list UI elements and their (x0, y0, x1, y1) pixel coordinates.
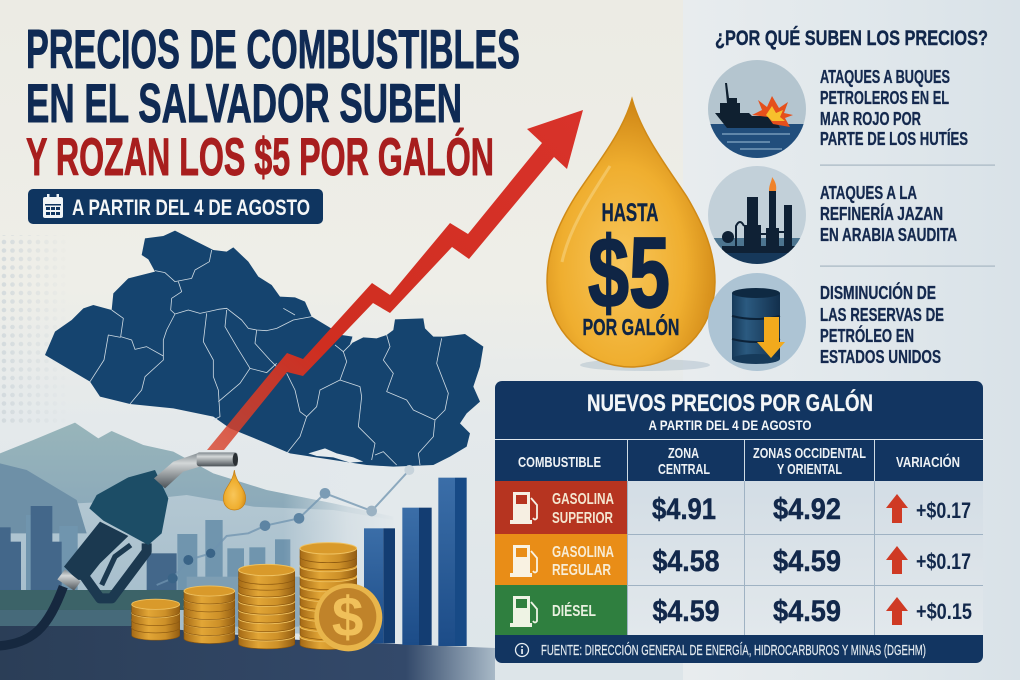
row: gasolina superior: +$0.17 (916, 498, 971, 523)
row: gasolina superior: SUPERIOR (552, 510, 613, 527)
icon: calendar (43, 194, 63, 218)
row: diésel (495, 585, 972, 635)
row: gasolina regular: REGULAR (552, 562, 611, 579)
fuel drop: hasta $5 por galón: POR GALÓN (582, 313, 680, 340)
table heading (587, 389, 873, 433)
title: PRECIOS DE COMBUSTIBLES (26, 18, 520, 80)
date badge (28, 189, 323, 224)
column headers: ZONA (668, 445, 699, 462)
icon: refinery (708, 166, 806, 264)
column headers: COMBUSTIBLE (518, 454, 601, 471)
row: diésel: $4.59 (773, 595, 841, 628)
line chart (157, 465, 414, 585)
title: Y ROZAN LOS $5 POR GALÓN (26, 127, 494, 187)
text block: disminución de reservas: DISMINUCIÓN DE (820, 282, 936, 303)
right side fog (283, 460, 400, 647)
fuel drop: hasta $5 por galón: HASTA (602, 199, 658, 227)
icon: small fuel drop (223, 470, 246, 510)
row: gasolina superior: $4.91 (652, 493, 716, 526)
text block: ataques a buques: MAR ROJO POR (820, 109, 921, 129)
text block: ataques a la refinería: REFINERÍA JAZAN (820, 203, 943, 224)
dollar coin: $ (332, 587, 363, 650)
text block: ataques a la refinería (820, 183, 957, 245)
rising red arrow (207, 110, 583, 450)
text block: ataques a buques: PARTE DE LOS HUTÍES (820, 128, 968, 149)
table heading: NUEVOS PRECIOS POR GALÓN (587, 389, 873, 417)
fuel nozzle (0, 452, 238, 646)
coin stacks (132, 543, 357, 650)
city skyline (0, 506, 329, 627)
icon: oil barrel with down arrow (708, 273, 806, 371)
table heading: A PARTIR DEL 4 DE AGOSTO (648, 417, 812, 433)
icon: fuel pump (510, 596, 537, 627)
text block: disminución de reservas: PETRÓLEO EN (820, 325, 914, 346)
date badge: A PARTIR DEL 4 DE AGOSTO (72, 195, 310, 220)
text block: disminución de reservas: ESTADOS UNIDOS (820, 347, 941, 367)
dollar coin (314, 583, 382, 651)
text block: ataques a buques: PETROLEROS EN EL (820, 88, 949, 108)
column headers: ZONAS OCCIDENTAL (753, 445, 866, 462)
column headers: VARIACIÓN (896, 453, 960, 471)
row: gasolina regular: +$0.17 (916, 549, 971, 574)
row: gasolina regular: $4.58 (652, 545, 720, 578)
scene foreground (0, 452, 467, 651)
row: diésel: DIÉSEL (552, 601, 596, 620)
row: diésel: $4.59 (652, 595, 720, 628)
column headers (518, 445, 960, 478)
icon: fuel pump (510, 545, 537, 577)
title (26, 18, 520, 187)
row: gasolina regular: $4.59 (773, 545, 841, 578)
text block: ataques a buques (820, 67, 968, 149)
icon: fuel pump (510, 492, 537, 524)
column headers: Y ORIENTAL (777, 461, 842, 478)
row: gasolina superior: $4.92 (773, 493, 841, 526)
row: gasolina superior (495, 481, 971, 534)
text block: disminución de reservas: LAS RESERVAS DE (820, 305, 944, 325)
map of El Salvador (45, 231, 483, 467)
background scene: mountains and city (0, 423, 400, 647)
text block: ataques a la refinería: EN ARABIA SAUDITA (820, 225, 957, 245)
text block: ataques a buques: ATAQUES A BUQUES (820, 67, 950, 87)
column headers: CENTRAL (658, 461, 710, 478)
row: gasolina regular: GASOLINA (552, 544, 614, 561)
fuel drop: hasta $5 por galón: $5 (588, 217, 670, 329)
icon: tanker with explosion (708, 60, 806, 158)
ground (0, 626, 495, 680)
row: gasolina superior: GASOLINA (552, 491, 614, 508)
row: gasolina regular (495, 534, 971, 585)
title: EN EL SALVADOR SUBEN (26, 72, 462, 134)
bar chart (364, 478, 467, 646)
row: diésel: +$0.15 (916, 599, 972, 624)
text block: ataques a la refinería: ATAQUES A LA (820, 183, 917, 203)
price table panel (495, 381, 983, 663)
fuel drop: hasta $5 por galón (547, 99, 715, 371)
text block: disminución de reservas (820, 282, 944, 367)
